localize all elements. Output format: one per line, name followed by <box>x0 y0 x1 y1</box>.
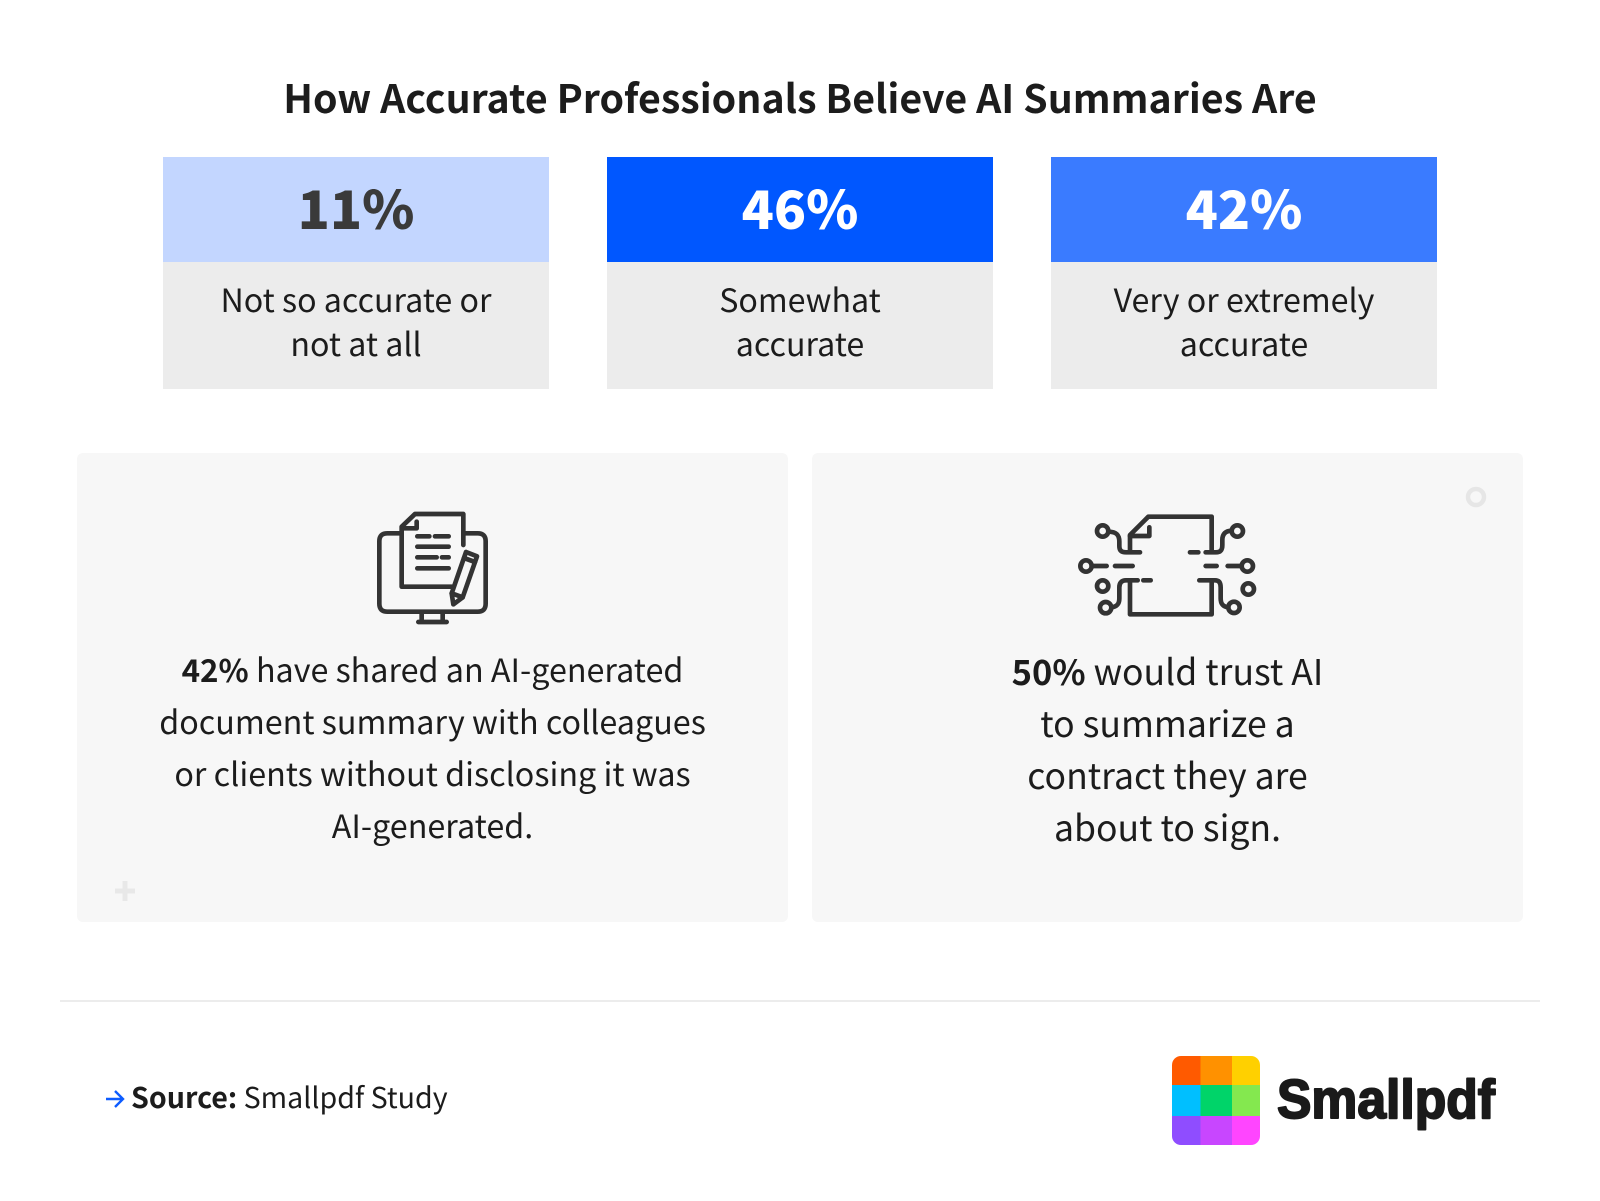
value: 11%: 11% <box>298 169 414 245</box>
label: not so accurate: not at all <box>290 320 422 366</box>
value: 11% <box>163 157 549 262</box>
label: not so accurate <box>163 262 549 389</box>
text: 50% trust: about to sign. <box>1054 801 1281 852</box>
icon: document on monitor with pencil <box>377 512 488 624</box>
decoration: ring <box>1466 487 1486 507</box>
value: 42% <box>1051 157 1437 262</box>
text: 42% shared: or clients without disclosing it was <box>174 750 691 796</box>
label: somewhat accurate <box>607 262 993 389</box>
stat card: 42% <box>1051 157 1437 389</box>
label: very or extremely accurate <box>1051 262 1437 389</box>
value: 42%: 42% <box>1186 169 1302 245</box>
text: 42% shared: document summary with colleagues <box>159 698 706 744</box>
stat card: 46% <box>607 157 993 389</box>
text: 50% trust <box>1012 645 1323 852</box>
value: 46% <box>607 157 993 262</box>
label: somewhat accurate: Somewhat <box>719 276 881 322</box>
text: 50% trust: 50% would trust AI <box>1012 645 1323 696</box>
text: 50% trust: to summarize a <box>1040 697 1295 748</box>
stat card: 11% <box>163 157 549 389</box>
text: 42% shared: AI-generated. <box>332 802 533 848</box>
icon: arrow <box>106 1090 125 1108</box>
title: How Accurate Professionals Believe AI Summaries Are <box>283 68 1317 125</box>
logo: Smallpdf <box>1172 1056 1496 1145</box>
source text: Source: Smallpdf Study <box>131 1076 448 1117</box>
icon: circuit document <box>1078 514 1256 617</box>
panel: trust AI <box>812 453 1523 922</box>
text: 42% shared: 42% have shared an AI-generated <box>182 646 683 692</box>
footer divider <box>60 1000 1540 1002</box>
decoration: plus <box>115 881 135 901</box>
value: 46%: 46% <box>742 169 858 245</box>
text: 42% shared <box>159 646 706 848</box>
label: not so accurate: Not so accurate or <box>221 276 491 322</box>
label: very or extremely accurate: Very or extremely <box>1114 276 1374 322</box>
panel: shared summaries <box>77 453 788 922</box>
text: 50% trust: contract they are <box>1027 749 1308 800</box>
label: very or extremely accurate: accurate <box>1180 320 1308 366</box>
logo mark <box>1172 1056 1260 1145</box>
label: somewhat accurate: accurate <box>736 320 864 366</box>
source note <box>106 1076 448 1117</box>
